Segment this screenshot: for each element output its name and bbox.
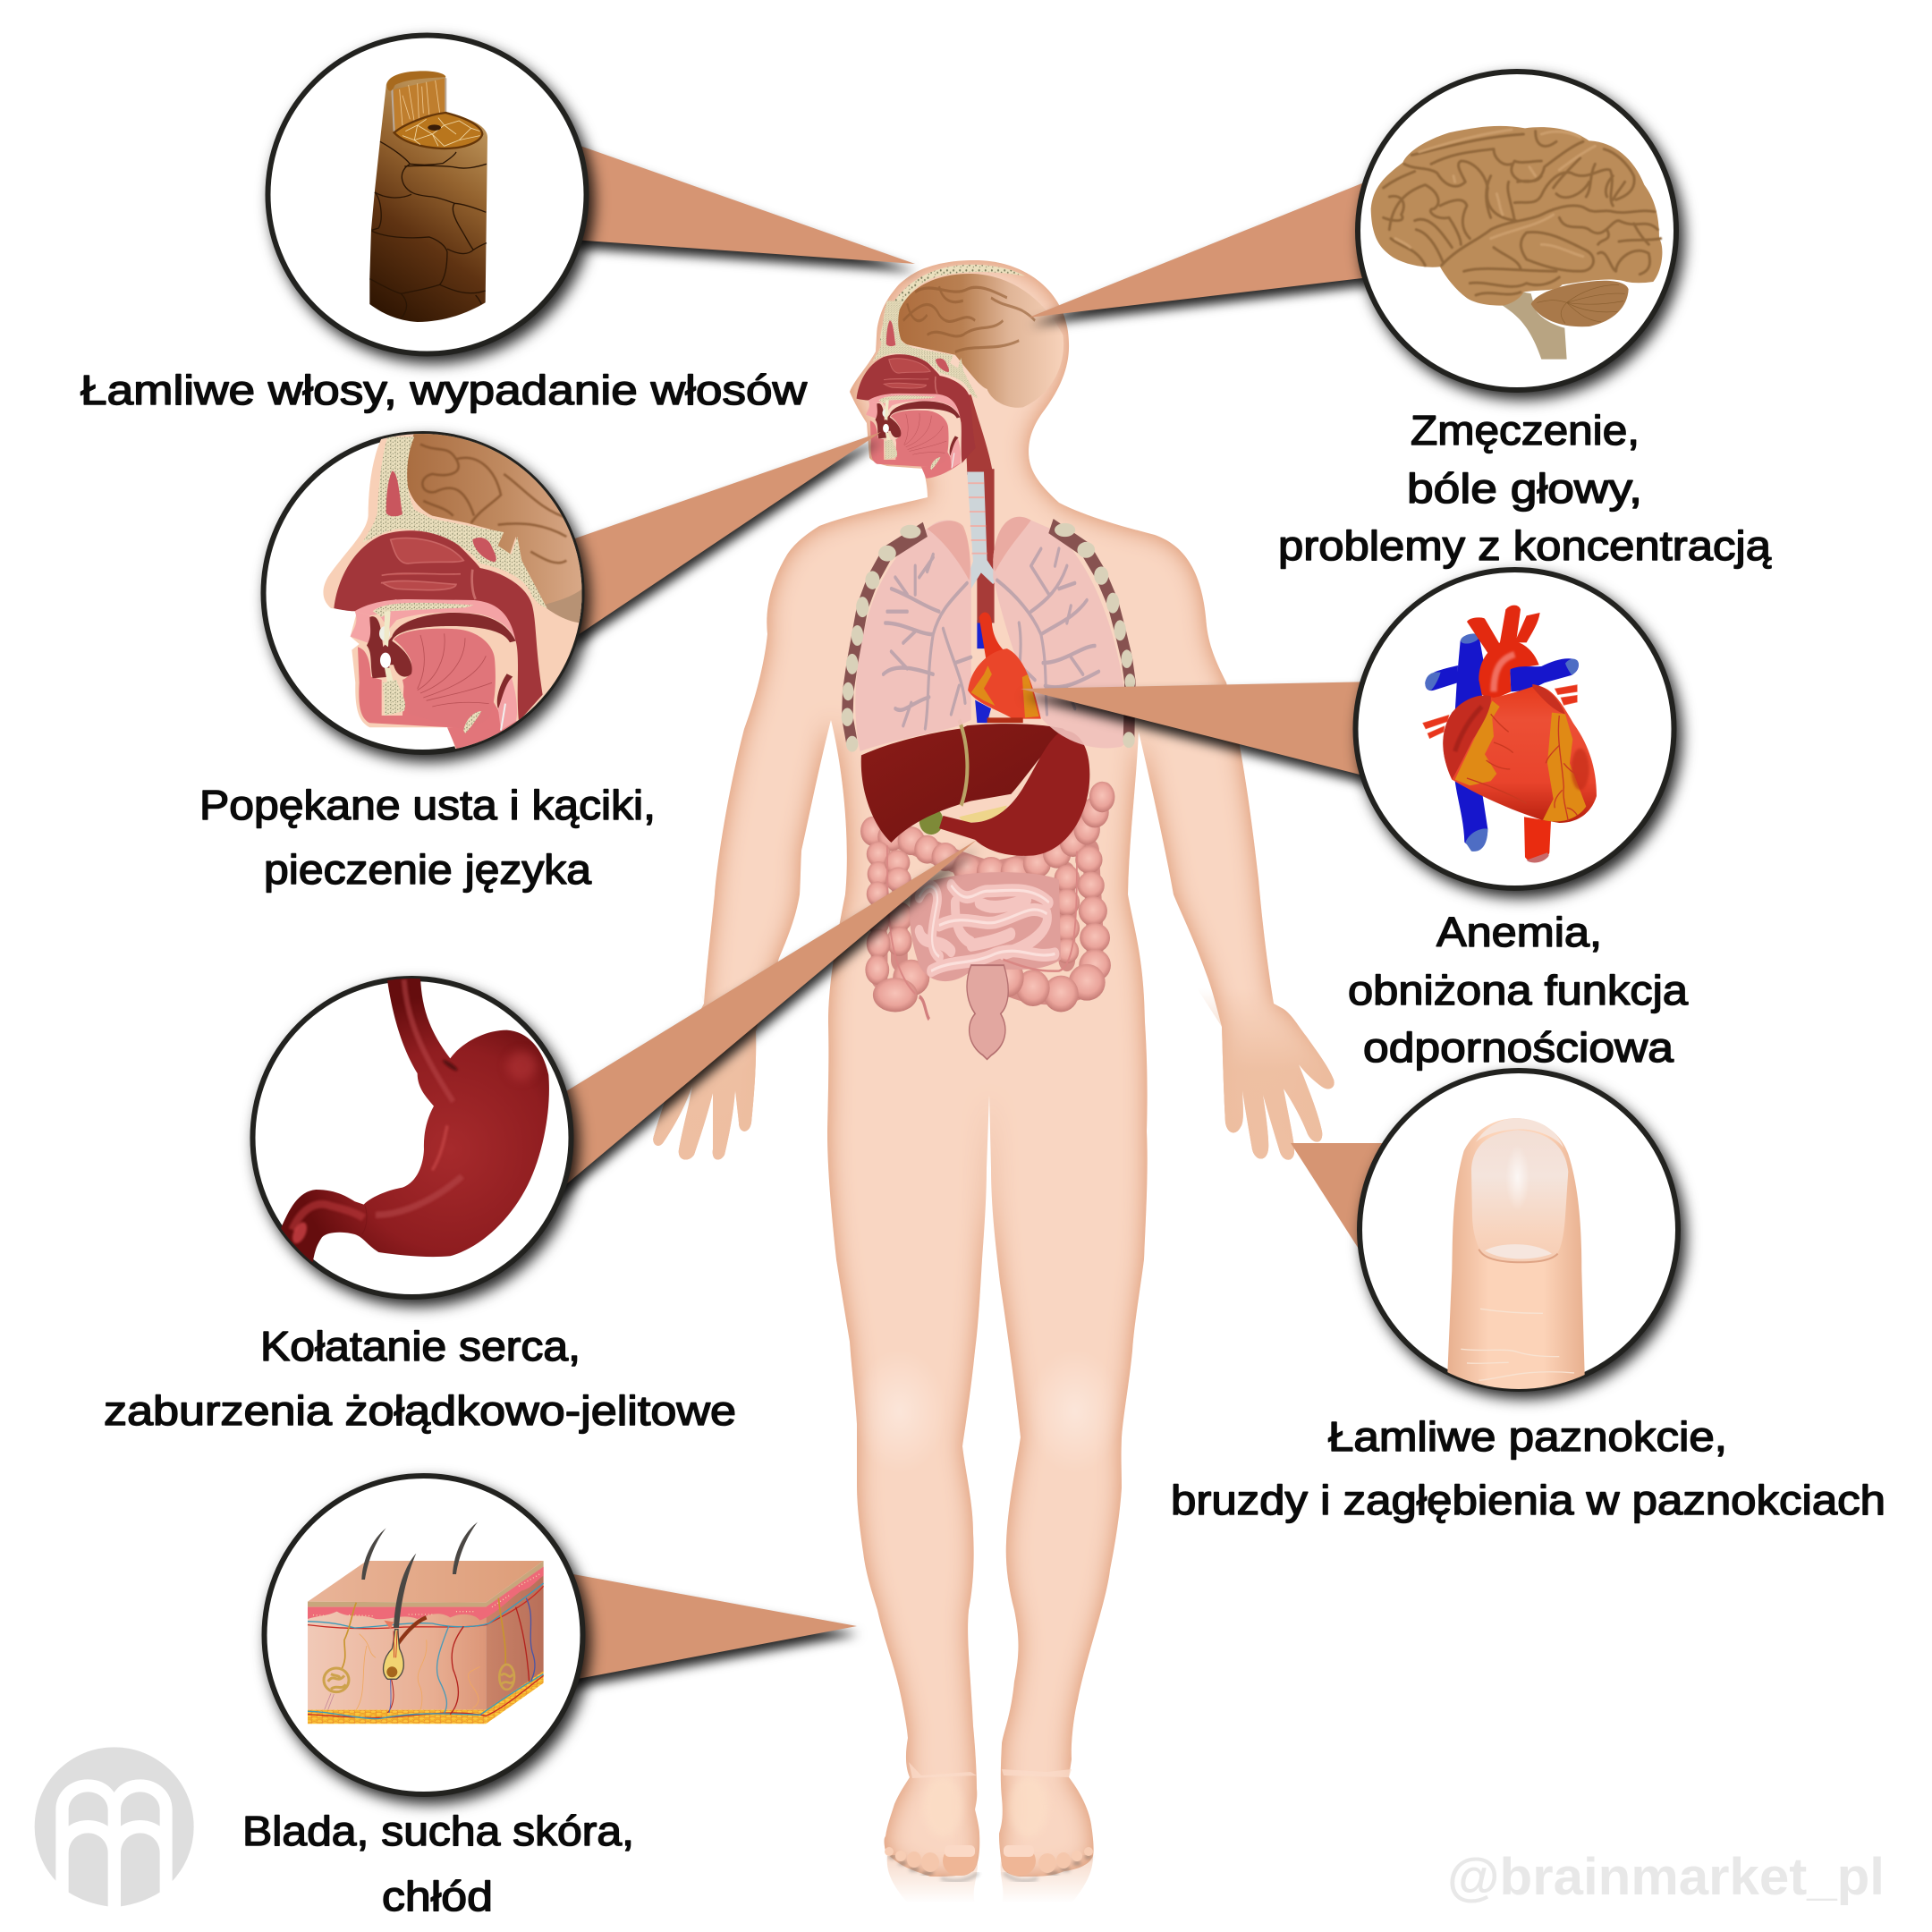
right lung	[993, 517, 1131, 748]
caption: stomach	[104, 1323, 736, 1434]
panel: heart circle	[1356, 570, 1674, 888]
caption: heart: Anemia,	[1436, 909, 1602, 955]
rib ends	[842, 523, 1135, 752]
pointer: stomach	[555, 840, 977, 1194]
panel: nail circle	[1360, 1071, 1678, 1393]
liver	[861, 724, 1067, 843]
caption: heart: odpornościowa	[1363, 1024, 1674, 1071]
gallbladder	[919, 807, 943, 835]
panel: stomach circle	[252, 978, 571, 1297]
ribs left	[847, 530, 925, 744]
ankle and foot detail	[909, 1762, 1072, 1837]
panel: hair circle	[268, 36, 587, 354]
lung apex shading	[928, 517, 1031, 580]
brain in head	[896, 274, 1063, 408]
small intestine	[910, 872, 1061, 981]
caption: skin: chłód	[382, 1873, 493, 1919]
nasal and oral cavity	[857, 301, 978, 479]
skull band	[880, 265, 1063, 408]
pointer: heart	[1021, 682, 1377, 779]
hand tint	[653, 996, 1335, 1160]
toes	[885, 1845, 1093, 1881]
caption: skin	[242, 1808, 634, 1919]
caption: skin: Blada, sucha skóra,	[242, 1808, 634, 1854]
caption: mouth	[199, 782, 656, 893]
great vessels	[975, 620, 991, 723]
trachea and oesophagus	[959, 394, 998, 623]
heart in body	[968, 613, 1041, 723]
caption: brain: problemy z koncentracją	[1278, 522, 1771, 569]
panel: mouth circle	[263, 432, 584, 752]
icon: stomach	[280, 978, 549, 1264]
pointer: mouth	[572, 432, 881, 639]
panel: brain circle	[1358, 72, 1676, 390]
anatomy: torso organs	[842, 394, 1135, 1059]
human body figure	[626, 260, 1342, 1881]
foot reflection	[887, 1856, 1093, 1903]
appendix	[919, 996, 929, 1020]
bronchi	[883, 549, 1099, 728]
caption: stomach: Kołatanie serca,	[260, 1323, 580, 1369]
caption: heart: obniżona funkcja	[1348, 967, 1688, 1013]
panel: skin circle	[265, 1476, 583, 1794]
pancreas	[959, 806, 1007, 823]
caption: brain: Zmęczenie,	[1411, 407, 1640, 453]
stomach in body	[939, 730, 1089, 856]
icon: nasal and oral section	[323, 432, 584, 751]
rectum	[967, 965, 1008, 1059]
watermark handle: @brainmarket_pl	[1447, 1848, 1885, 1906]
icon: hair shaft	[369, 71, 487, 322]
caption: hair: Łamliwe włosy, wypadanie włosów	[80, 367, 808, 413]
pointer: hair	[572, 143, 915, 264]
large intestine	[860, 782, 1114, 1012]
left knee highlight	[853, 1349, 946, 1474]
icon: heart	[1423, 606, 1597, 862]
caption: brain: bóle głowy,	[1407, 465, 1642, 512]
right knee highlight	[1029, 1349, 1122, 1474]
anatomy: head section	[857, 265, 1063, 479]
caption: nail: Łamliwe paznokcie,	[1328, 1413, 1727, 1460]
watermark logo	[35, 1747, 194, 1926]
caption: mouth: Popękane usta i kąciki,	[199, 782, 656, 828]
icon: skin cross-section	[308, 1522, 544, 1724]
icon: brain	[1371, 126, 1662, 360]
caption: nail: bruzdy i zagłębienia w paznokciach	[1171, 1477, 1885, 1523]
ribs right	[1051, 526, 1130, 740]
body silhouette	[653, 260, 1335, 1877]
caption: heart	[1348, 909, 1688, 1071]
caption: nail	[1171, 1413, 1885, 1523]
pointer: nail	[1291, 1143, 1395, 1306]
hepatic ligament	[959, 720, 967, 806]
caption: stomach: zaburzenia żołądkowo-jelitowe	[104, 1387, 736, 1434]
pointer: brain	[1029, 177, 1377, 318]
icon: finger and nail	[1447, 1118, 1585, 1393]
caption: brain	[1278, 407, 1771, 569]
colon underlay	[869, 794, 1105, 993]
mesentery vessel	[887, 845, 1077, 994]
pointer: skin	[564, 1572, 857, 1682]
caption: mouth: pieczenie języka	[264, 846, 591, 893]
left lung	[855, 520, 971, 751]
